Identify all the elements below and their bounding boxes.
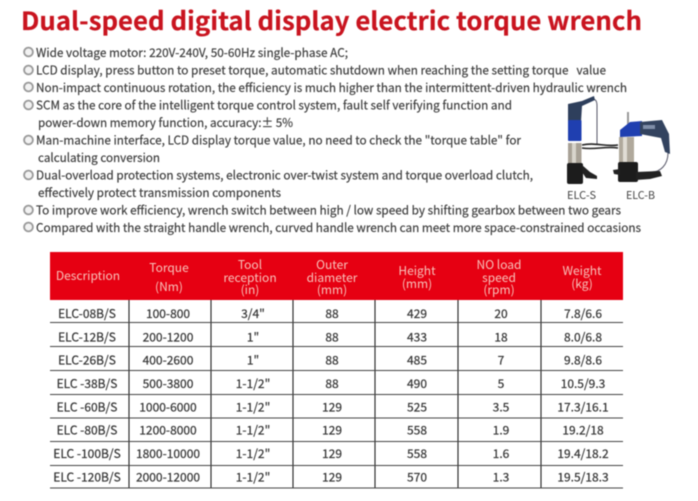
feature: SCM control: SCM as the core of the intelligent torque control system, fault self verifying function and — [36, 96, 512, 114]
row: ELC-12B/S: 8.0/6.8 — [564, 328, 602, 346]
feature: voltage: Wide voltage motor: 220V-240V, 50-60Hz single-phase AC; — [36, 44, 348, 61]
row: ELC-80B/S: 1200-8000 — [139, 422, 197, 438]
row: ELC-120B/S: 570 — [407, 468, 427, 486]
row: ELC-80B/S: 1.9 — [493, 422, 509, 438]
row: ELC-80B/S: 19.2/18 — [562, 422, 604, 438]
row: ELC-100B/S: ELC -100B/S — [53, 445, 121, 462]
row: ELC-60B/S: 17.3/16.1 — [557, 398, 609, 416]
row: ELC-08B/S — [58, 305, 602, 322]
product photo: ELC-S and ELC-B wrenches — [567, 96, 670, 203]
row: ELC-12B/S: 433 — [407, 328, 427, 346]
row: ELC-12B/S: 1" — [247, 328, 259, 346]
table header: Tool — [238, 256, 262, 273]
feature list — [24, 44, 641, 236]
row: ELC-120B/S: 1.3 — [493, 468, 509, 486]
feature: man-machine interface: calculating conversion — [38, 149, 160, 166]
table header: (mm) — [317, 281, 347, 298]
power cables — [582, 144, 618, 149]
row: ELC-26B/S: 9.8/8.6 — [564, 352, 602, 368]
row: ELC-100B/S: 1-1/2" — [236, 445, 270, 462]
table header: (kg) — [571, 275, 593, 292]
row: ELC-12B/S: 200-1200 — [143, 328, 194, 346]
row: ELC-120B/S: 129 — [322, 468, 342, 486]
table header: diameter — [307, 269, 358, 286]
row: ELC-08B/S: 7.8/6.6 — [564, 305, 602, 322]
bullet icons — [24, 48, 33, 231]
row: ELC-100B/S: 1.6 — [493, 445, 510, 462]
row: ELC-80B/S: 129 — [322, 422, 342, 438]
row: ELC-08B/S: ELC-08B/S — [58, 305, 116, 322]
table header: Weight — [562, 262, 602, 279]
table header: NO load — [477, 256, 521, 273]
table header: (Nm) — [155, 278, 183, 295]
row: ELC-26B/S: 88 — [325, 352, 339, 368]
feature: man-machine interface — [36, 132, 521, 166]
label: ELC-B: ELC-B — [626, 187, 655, 203]
feature: overload protection: Dual-overload protection systems, electronic over-twist system and torque overload clutch, — [36, 166, 533, 184]
table header: (mm) — [402, 275, 432, 292]
feature: SCM control: power-down memory function, accuracy:± 5% — [38, 114, 293, 131]
row: ELC-80B/S: 558 — [407, 422, 427, 438]
row: ELC-60B/S: 3.5 — [493, 398, 510, 416]
label: ELC-S: ELC-S — [567, 187, 596, 203]
row: ELC-26B/S: 7 — [498, 352, 505, 368]
row: ELC-100B/S: 1800-10000 — [136, 445, 200, 462]
row: ELC-60B/S: ELC -60B/S — [57, 398, 117, 416]
row: ELC-120B/S: ELC -120B/S — [53, 468, 121, 486]
row: ELC-80B/S: ELC -80B/S — [57, 422, 117, 438]
table header: Outer — [316, 256, 348, 273]
row: ELC-08B/S: 3/4" — [241, 305, 265, 322]
row: ELC-38B/S: 88 — [325, 375, 339, 392]
feature: non-impact rotation: Non-impact continuous rotation, the efficiency is much higher than the intermittent-driven hydraulic wrench — [36, 79, 627, 96]
feature: curved handle: Compared with the straight handle wrench, curved handle wrench can meet more space-constrained occasions — [36, 219, 641, 236]
row: ELC-08B/S: 20 — [494, 305, 508, 322]
row: ELC-100B/S: 558 — [407, 445, 427, 462]
table header: reception — [223, 269, 277, 286]
title: Dual-speed digital display electric torque wrench — [21, 2, 642, 38]
row: ELC-60B/S: 1000-6000 — [139, 398, 197, 416]
row: ELC-60B/S: 129 — [322, 398, 342, 416]
row: ELC-26B/S: 400-2600 — [143, 352, 194, 368]
wrench ELC-B — [613, 112, 670, 182]
row: ELC-08B/S: 429 — [407, 305, 427, 322]
row: ELC-60B/S: 525 — [407, 398, 427, 416]
row: ELC-38B/S: 5 — [498, 375, 505, 392]
row: ELC-26B/S: 485 — [407, 352, 427, 368]
feature: LCD display: LCD display, press button to preset torque, automatic shutdown when reaching the setting torque value — [36, 62, 606, 78]
table header: Height — [398, 262, 436, 279]
row: ELC-08B/S: 100-800 — [146, 305, 190, 322]
row: ELC-38B/S — [57, 375, 605, 392]
row: ELC-26B/S: 1" — [247, 352, 259, 368]
row: ELC-08B/S: 88 — [325, 305, 339, 322]
feature: gearbox: To improve work efficiency, wrench switch between high / low speed by shifting gearbox between two gears — [36, 202, 621, 218]
feature: overload protection: effectively protect transmission components — [38, 184, 281, 201]
specification table — [50, 252, 623, 488]
table grid lines — [50, 300, 623, 488]
table header: (rpm) — [483, 281, 515, 298]
row: ELC-80B/S — [57, 422, 604, 438]
row: ELC-12B/S — [58, 328, 602, 346]
row: ELC-38B/S: ELC -38B/S — [57, 375, 117, 392]
wrench ELC-S — [567, 96, 597, 184]
table header — [50, 252, 623, 300]
row: ELC-26B/S — [58, 352, 602, 368]
row: ELC-12B/S: 88 — [325, 328, 339, 346]
row: ELC-80B/S: 1-1/2" — [236, 422, 270, 438]
row: ELC-38B/S: 490 — [407, 375, 427, 392]
table header: Description — [56, 267, 120, 284]
row: ELC-38B/S: 500-3800 — [143, 375, 194, 392]
row: ELC-100B/S: 19.4/18.2 — [557, 445, 609, 462]
row: ELC-100B/S: 129 — [322, 445, 342, 462]
row: ELC-100B/S — [53, 445, 609, 462]
row: ELC-26B/S: ELC-26B/S — [58, 352, 116, 368]
row: ELC-120B/S: 19.5/18.3 — [557, 468, 609, 486]
table header: Torque — [149, 259, 189, 276]
row: ELC-12B/S: ELC-12B/S — [58, 328, 116, 346]
row: ELC-38B/S: 10.5/9.3 — [561, 375, 605, 392]
row: ELC-120B/S: 1-1/2" — [236, 468, 270, 486]
row: ELC-60B/S — [57, 398, 609, 416]
row: ELC-60B/S: 1-1/2" — [236, 398, 270, 416]
row: ELC-12B/S: 18 — [494, 328, 508, 346]
feature: SCM control — [36, 96, 512, 131]
table header: (in) — [241, 281, 259, 298]
feature: overload protection — [36, 166, 533, 201]
row: ELC-120B/S — [53, 468, 609, 486]
feature: man-machine interface: Man-machine interface, LCD display torque value, no need to check the "torque table" for — [36, 132, 521, 148]
row: ELC-38B/S: 1-1/2" — [236, 375, 270, 392]
row: ELC-120B/S: 2000-12000 — [136, 468, 200, 486]
table header: speed — [482, 269, 516, 286]
